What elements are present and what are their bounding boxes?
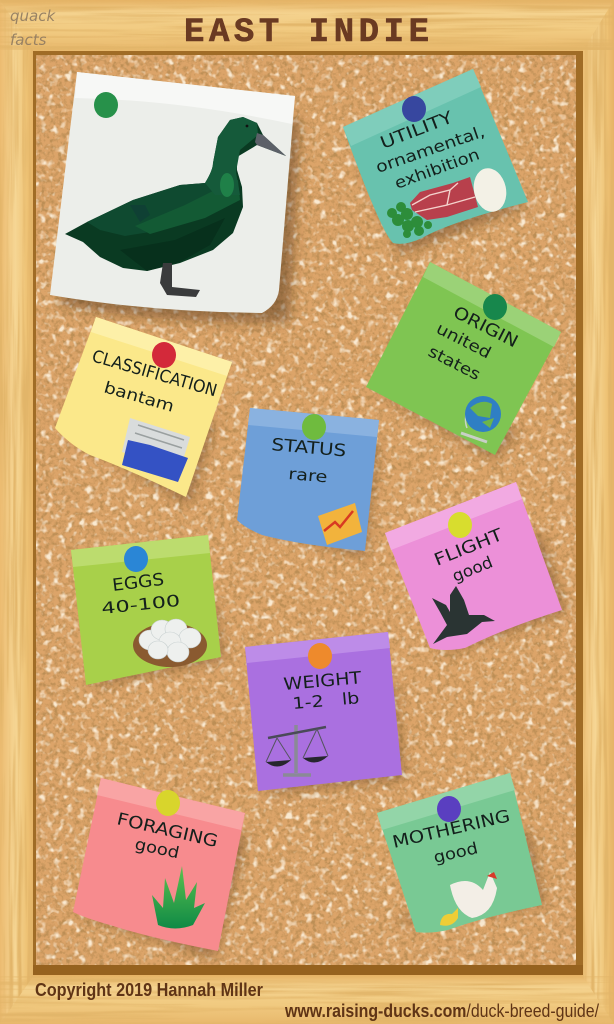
text: united states: states — [425, 342, 484, 384]
text: united states — [425, 319, 494, 384]
panel: duck photo note — [50, 72, 300, 322]
quack facts logo — [10, 7, 56, 49]
heading: ORIGIN — [450, 303, 521, 352]
icon: egg nest — [133, 619, 207, 667]
heading: FORAGING — [115, 809, 220, 852]
quack facts logo: facts — [10, 31, 47, 49]
panel: foraging note — [73, 778, 248, 958]
panel: utility note — [343, 69, 530, 255]
icon: flying duck — [432, 586, 495, 644]
icon: grass — [152, 866, 205, 928]
pin: red — [152, 342, 176, 368]
icon: duck — [65, 117, 286, 297]
text: rare: rare — [288, 464, 328, 486]
text: ornamental, exhibition: ornamental, — [373, 122, 487, 177]
icon: chart — [318, 503, 362, 545]
heading: EGGS — [111, 570, 165, 596]
panel: classification note — [55, 317, 232, 505]
heading: UTILITY — [378, 108, 456, 154]
panel: origin note — [366, 262, 561, 460]
icon: meat, egg and parsley — [387, 165, 510, 238]
panel: mothering note — [377, 773, 545, 933]
panel: status note — [237, 408, 379, 558]
quack facts logo: quack — [10, 7, 56, 25]
pin: blue — [124, 546, 148, 572]
title: EAST INDIE — [184, 14, 429, 52]
pin: yellow — [448, 512, 472, 538]
heading: CLASSIFICATION — [90, 347, 219, 401]
pin: green — [483, 294, 507, 320]
pin: purple — [437, 796, 461, 822]
text: good: good — [432, 838, 480, 867]
panel: weight note — [245, 632, 405, 795]
heading: MOTHERING — [391, 806, 512, 853]
pin: green — [94, 92, 118, 118]
website url: www.raising-ducks.com/duck-breed-guide/ — [284, 1001, 599, 1021]
text: united states: united — [433, 319, 494, 362]
text: 1-2 lb: 1-2 lb — [292, 688, 360, 713]
icon: globe — [461, 396, 501, 442]
pin: green — [302, 414, 326, 440]
heading: WEIGHT — [283, 668, 363, 695]
icon: balance scale — [266, 725, 328, 775]
icon: hen and chick — [440, 872, 497, 926]
text: 40-100: 40-100 — [100, 591, 181, 618]
panel: eggs note — [71, 535, 225, 688]
text: ornamental, exhibition: exhibition — [392, 144, 482, 193]
heading: FLIGHT — [431, 525, 506, 571]
cork board — [36, 55, 576, 965]
heading: STATUS — [271, 435, 347, 462]
text: good: good — [449, 552, 495, 586]
pin: yellow — [156, 790, 180, 816]
pin: orange — [308, 643, 332, 669]
pin: blue — [402, 96, 426, 122]
icon: folder — [122, 418, 190, 482]
copyright: Copyright 2019 Hannah Miller — [35, 980, 263, 1000]
text: ornamental, exhibition — [373, 122, 487, 193]
panel: flight note — [385, 482, 565, 655]
text: good: good — [133, 834, 181, 862]
text: bantam: bantam — [102, 378, 176, 416]
